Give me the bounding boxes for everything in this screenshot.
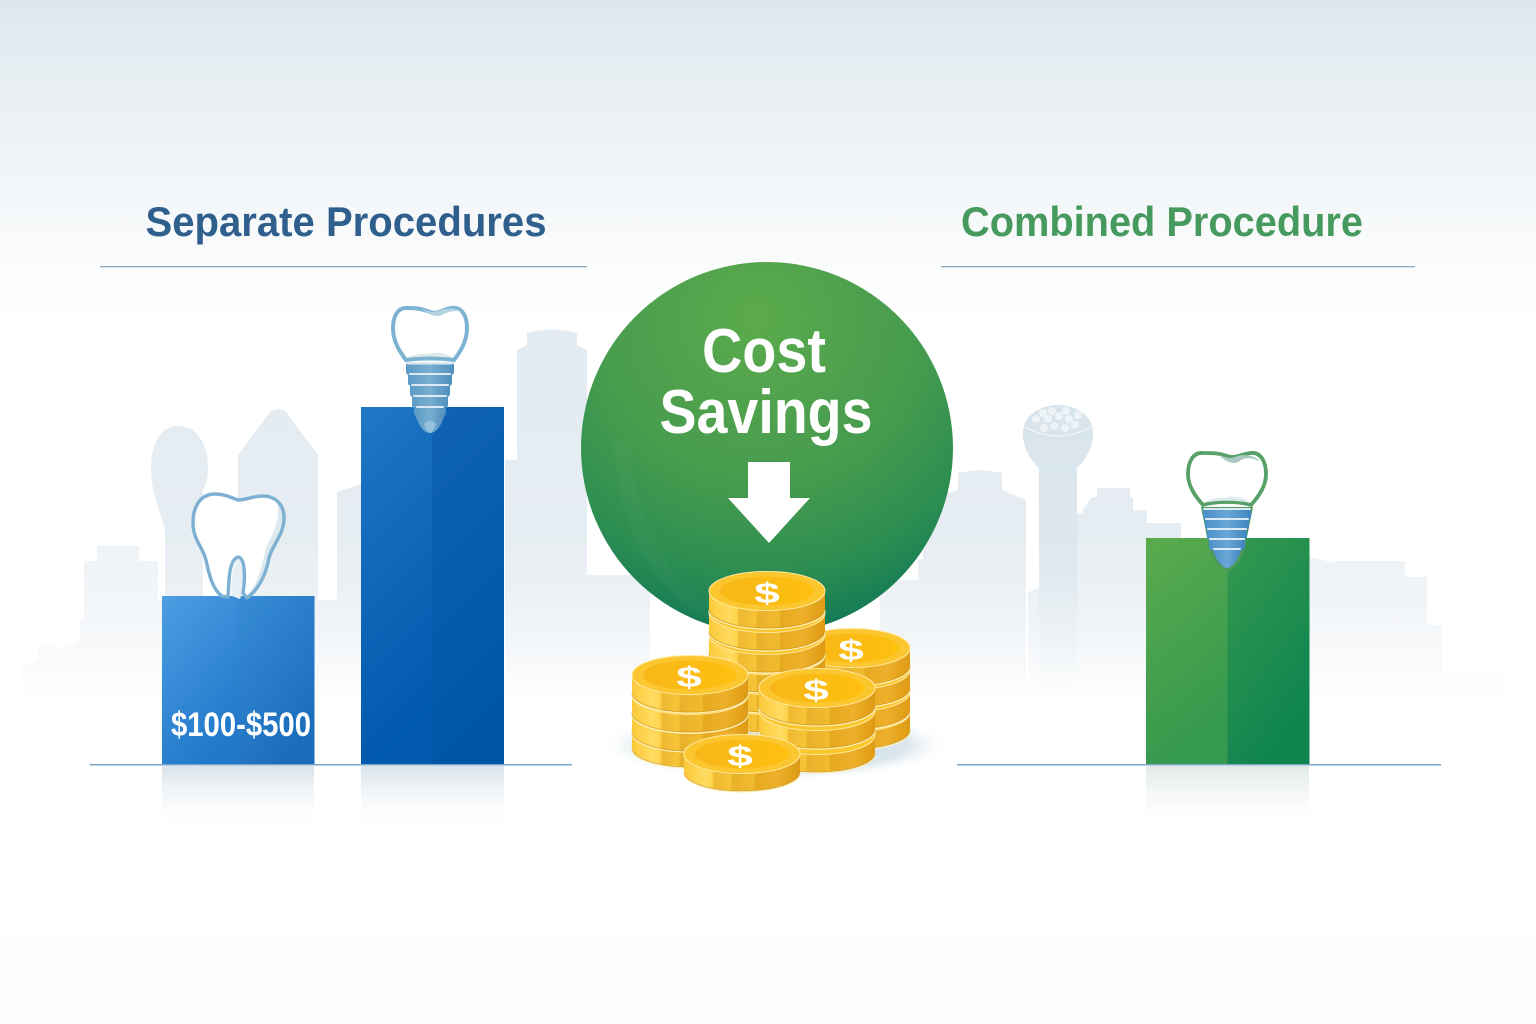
coin: front single (684, 734, 800, 792)
skyline: left (22, 330, 650, 700)
icon: down arrow (728, 462, 810, 543)
coin stack: back right (794, 628, 910, 750)
coin stack: front middle: $ (803, 674, 829, 707)
coin stacks (599, 572, 951, 792)
circle: cost savings badge (581, 262, 953, 634)
icon: natural tooth (193, 494, 284, 599)
skyline: right (880, 405, 1503, 700)
icon: dental implant, blue (393, 308, 467, 433)
coin stack: front middle (759, 668, 875, 773)
skyline tower (1023, 405, 1093, 700)
heading: Separate Procedures: Separate Procedures (146, 198, 546, 245)
bar: combined procedure cost (1146, 538, 1310, 764)
icon: dental implant, green (1188, 453, 1266, 571)
bar label: $100-$500 (171, 706, 311, 744)
divider: left heading rule (100, 266, 587, 267)
heading: Combined Procedure: Combined Procedure (961, 198, 1363, 245)
badge title: Cost (702, 317, 826, 386)
badge title: Savings (660, 378, 872, 447)
coin: front single: $ (727, 740, 753, 773)
coin stack: left (632, 656, 748, 768)
bar reflections (162, 766, 1309, 832)
coin stack: back right: $ (838, 634, 864, 667)
coin stack: left: $ (676, 661, 702, 694)
coin stack: back centre: $ (754, 577, 780, 610)
coin shadow (599, 709, 951, 781)
coin stack: back centre (709, 572, 825, 733)
bar: separate implant cost (361, 407, 504, 764)
baseline: right chart (957, 764, 1441, 766)
baseline: left chart (90, 764, 572, 766)
bar: tooth extraction cost (162, 596, 314, 764)
divider: right heading rule (941, 266, 1415, 267)
